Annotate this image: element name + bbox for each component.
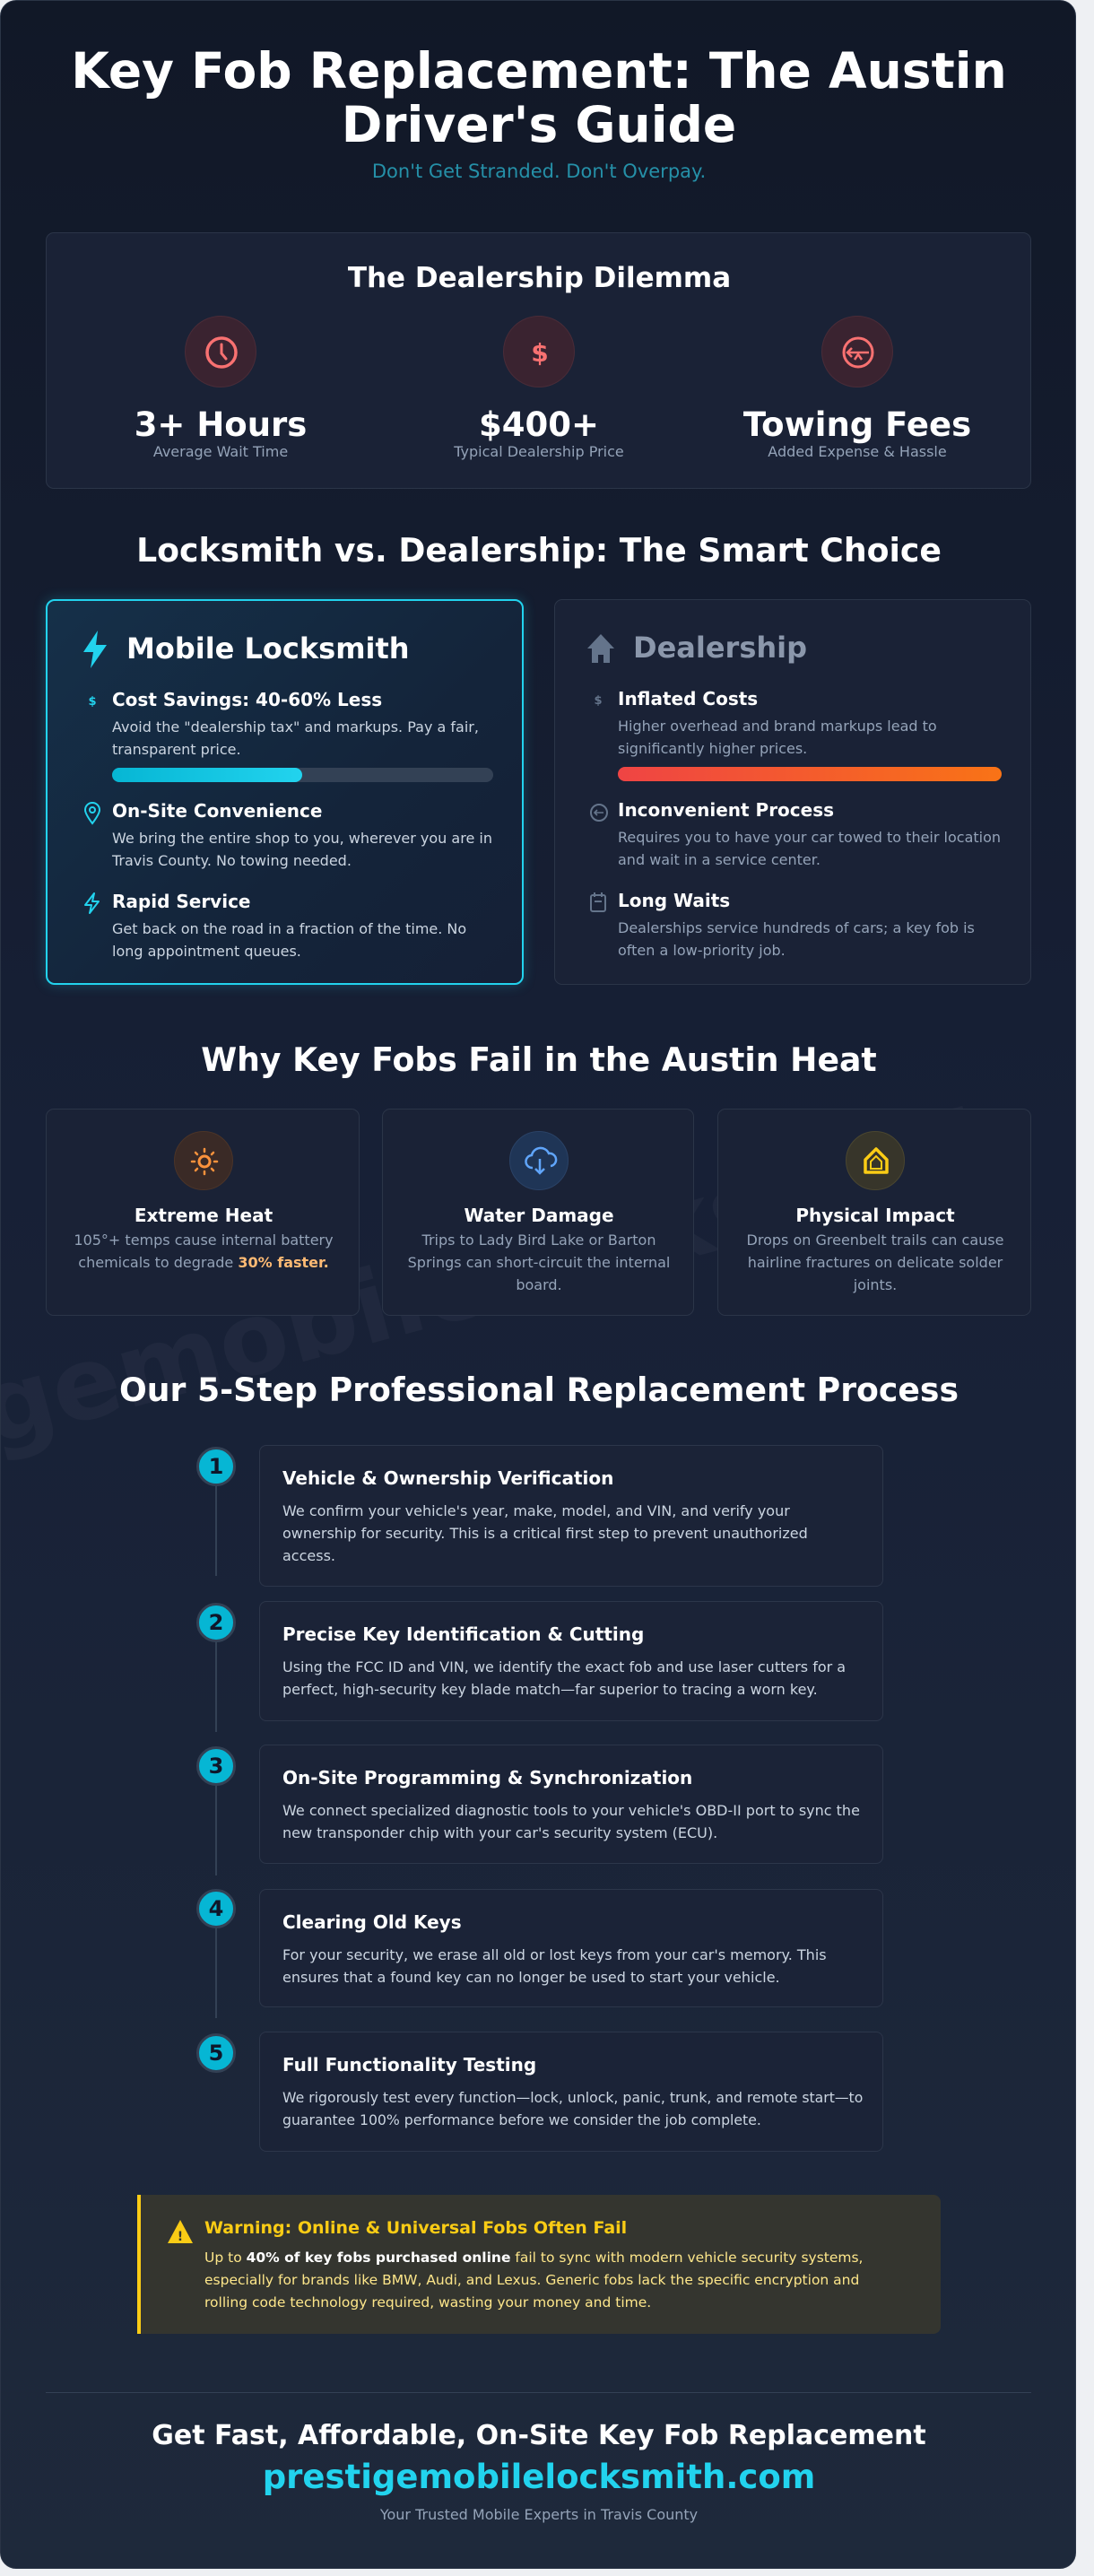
stat: towing: Added Expense & Hassle — [768, 443, 947, 460]
footer: Get Fast, Affordable, On-Site Key Fob Replacement — [152, 2420, 926, 2451]
heading: dealership: Dealership — [633, 631, 807, 665]
text: On-Site Programming & Synchronization — [282, 1767, 692, 1788]
stat: price: Typical Dealership Price — [454, 443, 624, 460]
icon: sun — [174, 1131, 233, 1190]
text: For your security, we erase all old or lost keys from your car's memory. This ensures that a found key can no longer be used to start your vehicle. — [282, 1946, 827, 1986]
text: Full Functionality Testing — [282, 2054, 536, 2076]
item: inconvenient: Requires you to have your car towed to their location and wait in a service center. — [618, 829, 1001, 868]
step 1: 1 — [209, 1454, 223, 1479]
item: inflated costs: Inflated Costs — [618, 688, 758, 709]
icon: warning — [168, 2220, 193, 2244]
stat: wait time: 3+ Hours — [135, 405, 307, 444]
item: on-site: We bring the entire shop to you, wherever you are in Travis County. No towing needed. — [112, 830, 492, 869]
item: rapid: Rapid Service — [112, 891, 251, 912]
icon: dollar: $ — [531, 338, 549, 368]
text: Vehicle & Ownership Verification — [282, 1467, 613, 1489]
item: rapid: Get back on the road in a fraction of the time. No long appointment queues. — [112, 920, 466, 960]
stat: towing: Towing Fees — [743, 405, 971, 444]
icon: building — [587, 634, 614, 663]
item: on-site: On-Site Convenience — [112, 800, 322, 822]
panel: extreme heat — [46, 1109, 360, 1316]
icon: warning: ! — [178, 2230, 183, 2244]
item: inflated costs: Higher overhead and brand markups lead to significantly higher prices. — [618, 718, 937, 757]
title: Key Fob Replacement: The Austin — [71, 42, 1007, 100]
panel: physical impact: Drops on Greenbelt trails can cause hairline fractures on delicate solder joints. — [747, 1231, 1003, 1293]
step 5: 5 — [209, 2041, 223, 2066]
progress bar — [112, 768, 493, 782]
item: on-site — [84, 800, 492, 869]
item: cost savings: Cost Savings: 40-60% Less — [112, 689, 382, 710]
item: inflated costs — [594, 688, 1002, 781]
text: We rigorously test every function—lock, unlock, panic, trunk, and remote start—to guarantee 100% performance before we consider the job complete. — [282, 2089, 863, 2128]
panel: dealership dilemma — [46, 232, 1031, 489]
stat: price: $400+ — [479, 405, 599, 444]
subtitle: Don't Get Stranded. Don't Overpay. — [372, 161, 706, 182]
text: Using the FCC ID and VIN, we identify the exact fob and use laser cutters for a perfect, high-security key blade match—far superior to tracing a worn key. — [282, 1658, 846, 1698]
panel: extreme heat: Extreme Heat — [135, 1205, 273, 1226]
panel: water damage — [382, 1109, 694, 1316]
item: cost savings — [88, 689, 493, 782]
stat: wait time: Average Wait Time — [153, 443, 288, 460]
footer: prestigemobilelocksmith.com — [263, 2458, 815, 2496]
text: We confirm your vehicle's year, make, model, and VIN, and verify your ownership for security. This is a critical first step to prevent unauthorized access. — [282, 1502, 808, 1564]
step 3: 3 — [209, 1754, 223, 1779]
panel: physical impact — [717, 1109, 1031, 1316]
panel: dealership — [554, 599, 1031, 985]
item: long waits — [590, 890, 975, 959]
item: long waits: Dealerships service hundreds of cars; a key fob is often a low-priority job. — [618, 919, 975, 959]
step 5 — [196, 2033, 236, 2073]
heading: dilemma: The Dealership Dilemma — [348, 262, 731, 294]
text: Clearing Old Keys — [282, 1911, 462, 1933]
footer: Your Trusted Mobile Experts in Travis County — [380, 2506, 698, 2523]
stat: towing — [743, 316, 971, 460]
icon: cloud — [509, 1131, 569, 1190]
icon: clock — [185, 316, 256, 387]
panel: mobile locksmith — [46, 599, 524, 985]
item: inconvenient — [590, 799, 1001, 868]
item: cost savings: Avoid the "dealership tax" and markups. Pay a fair, transparent price. — [112, 718, 479, 758]
heading: process: Our 5-Step Professional Replacement Process — [119, 1371, 959, 1409]
title — [71, 42, 1007, 153]
step 3 — [196, 1746, 236, 1786]
panel: water damage: Water Damage — [464, 1205, 614, 1226]
item: rapid — [84, 891, 466, 960]
heading: why fobs fail: Why Key Fobs Fail in the Austin Heat — [201, 1040, 877, 1079]
icon: tow — [821, 316, 893, 387]
panel: physical impact: Physical Impact — [795, 1205, 955, 1226]
text: Precise Key Identification & Cutting — [282, 1623, 644, 1645]
step 4 — [196, 1889, 236, 1928]
callout: warning: Warning: Online & Universal Fobs Often Fail — [204, 2218, 627, 2238]
stat: wait time — [135, 316, 307, 460]
callout: warning — [137, 2195, 941, 2334]
panel: water damage: Trips to Lady Bird Lake or Barton Springs can short-circuit the internal board. — [408, 1231, 670, 1293]
icon: dollar — [503, 316, 575, 387]
panel: extreme heat: 105°+ temps cause internal battery chemicals to degrade 30% faster. — [74, 1231, 334, 1271]
icon: bolt — [83, 631, 107, 668]
item: inconvenient: Inconvenient Process — [618, 799, 834, 821]
step 2 — [196, 1603, 236, 1642]
step 4: 4 — [209, 1896, 223, 1921]
title: Driver's Guide — [342, 96, 736, 153]
step 2: 2 — [209, 1610, 223, 1635]
callout: warning: Up to 40% of key fobs purchased online fail to sync with modern vehicle security systems, especially for brands like BMW, Audi, and Lexus. Generic fobs lack the specific encryption and rolling code technology required, wasting your money and time. — [204, 2250, 863, 2311]
step 1 — [196, 1447, 236, 1486]
progress bar — [618, 767, 1002, 781]
heading: comparison: Locksmith vs. Dealership: The Smart Choice — [136, 531, 942, 570]
stat: price — [454, 316, 624, 460]
footer — [152, 2420, 926, 2523]
item: long waits: Long Waits — [618, 890, 730, 911]
text: We connect specialized diagnostic tools to your vehicle's OBD-II port to sync the new transponder chip with your car's security system (ECU). — [282, 1802, 860, 1841]
heading: mobile locksmith: Mobile Locksmith — [126, 631, 410, 666]
icon: impact — [846, 1131, 905, 1190]
